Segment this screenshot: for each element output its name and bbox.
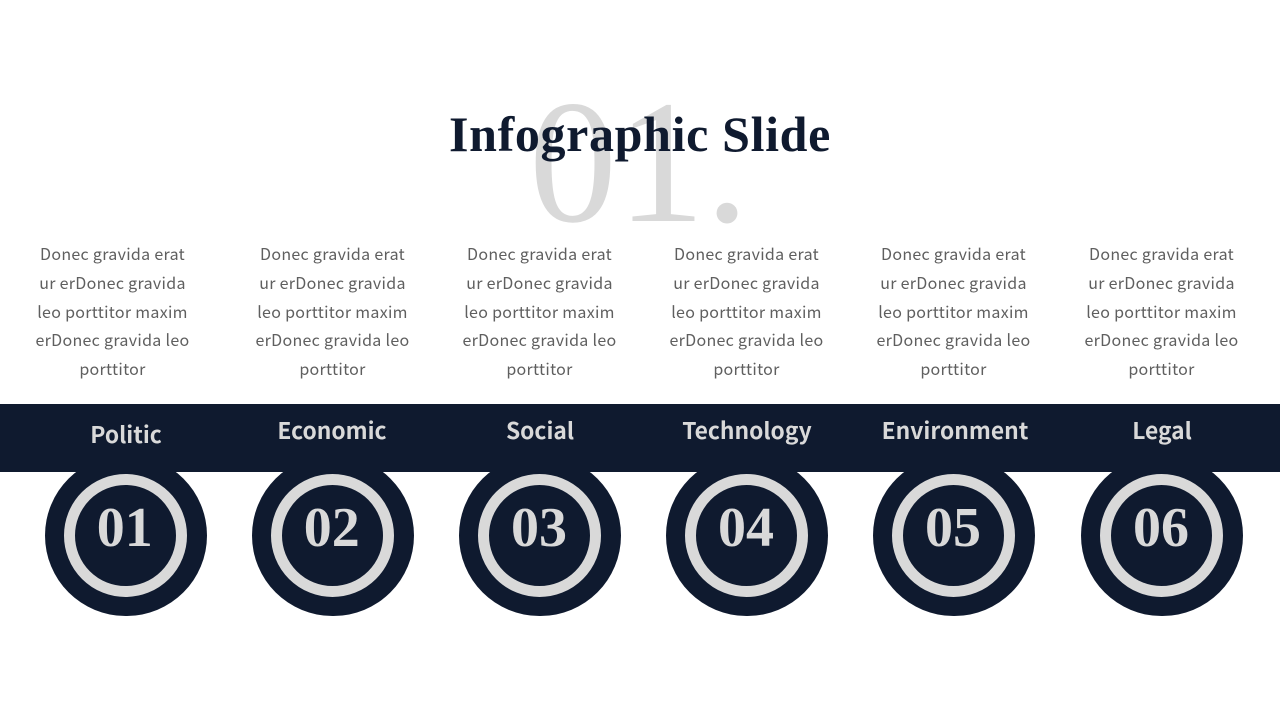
circle badge 05 [873,454,1035,616]
text block: legal: leo porttitor maxim [1086,298,1237,322]
text block: politic: ur erDonec gravida [39,270,186,294]
circle badge 01 [45,454,206,616]
text block: legal: porttitor [1128,356,1195,380]
text block: politic: erDonec gravida leo [35,327,190,351]
text block: economic: erDonec gravida leo [255,327,410,351]
text block: environment [876,241,1030,380]
label: Politic: Politic [90,416,162,450]
circle badge 05: 05 [925,497,981,559]
text block: environment: erDonec gravida leo [876,327,1030,351]
text block: politic: porttitor [79,356,146,380]
text block: legal: erDonec gravida leo [1084,327,1238,351]
text block: technology [669,241,824,380]
text block: social: leo porttitor maxim [464,298,615,322]
text block: economic: Donec gravida erat [260,241,405,265]
text block: environment: porttitor [920,356,987,380]
text block: environment: leo porttitor maxim [878,298,1029,322]
text block: economic [255,241,410,380]
category band [0,404,1280,472]
text block: technology: leo porttitor maxim [671,298,822,322]
text block: legal: ur erDonec gravida [1088,270,1235,294]
text block: economic: leo porttitor maxim [257,298,408,322]
text block: economic: ur erDonec gravida [259,270,406,294]
text block: legal [1084,241,1238,380]
label: Legal: Legal [1132,412,1192,446]
circle badge 06 [1081,454,1243,616]
text block: social [462,241,616,380]
text block: environment: Donec gravida erat [881,241,1026,265]
text block: social: Donec gravida erat [467,241,612,265]
label: Social: Social [506,412,574,446]
text block: social: porttitor [506,356,573,380]
label: Technology: Technology [682,412,812,446]
label: Environment: Environment [882,412,1028,446]
circle badge 02 [252,454,414,616]
circle badge 04 [666,454,828,616]
text block: social: ur erDonec gravida [466,270,613,294]
text block: politic: leo porttitor maxim [37,298,188,322]
circle badge 02: 02 [304,497,360,559]
circle badge 03 [459,454,621,616]
text block: politic: Donec gravida erat [40,241,185,265]
label: Economic: Economic [277,412,387,446]
text block: legal: Donec gravida erat [1089,241,1234,265]
text block: social: erDonec gravida leo [462,327,616,351]
circle badge 04: 04 [718,497,774,559]
text block: technology: porttitor [713,356,780,380]
text block: technology: erDonec gravida leo [669,327,824,351]
text block: politic [35,241,190,380]
watermark number: 01. [529,65,749,260]
circle badge 01: 01 [97,497,153,559]
text block: technology: Donec gravida erat [674,241,819,265]
text block: environment: ur erDonec gravida [880,270,1027,294]
circle badge 06: 06 [1133,497,1189,559]
text block: technology: ur erDonec gravida [673,270,820,294]
circle badge 03: 03 [511,497,567,559]
title: Infographic Slide [449,106,831,162]
text block: economic: porttitor [299,356,366,380]
